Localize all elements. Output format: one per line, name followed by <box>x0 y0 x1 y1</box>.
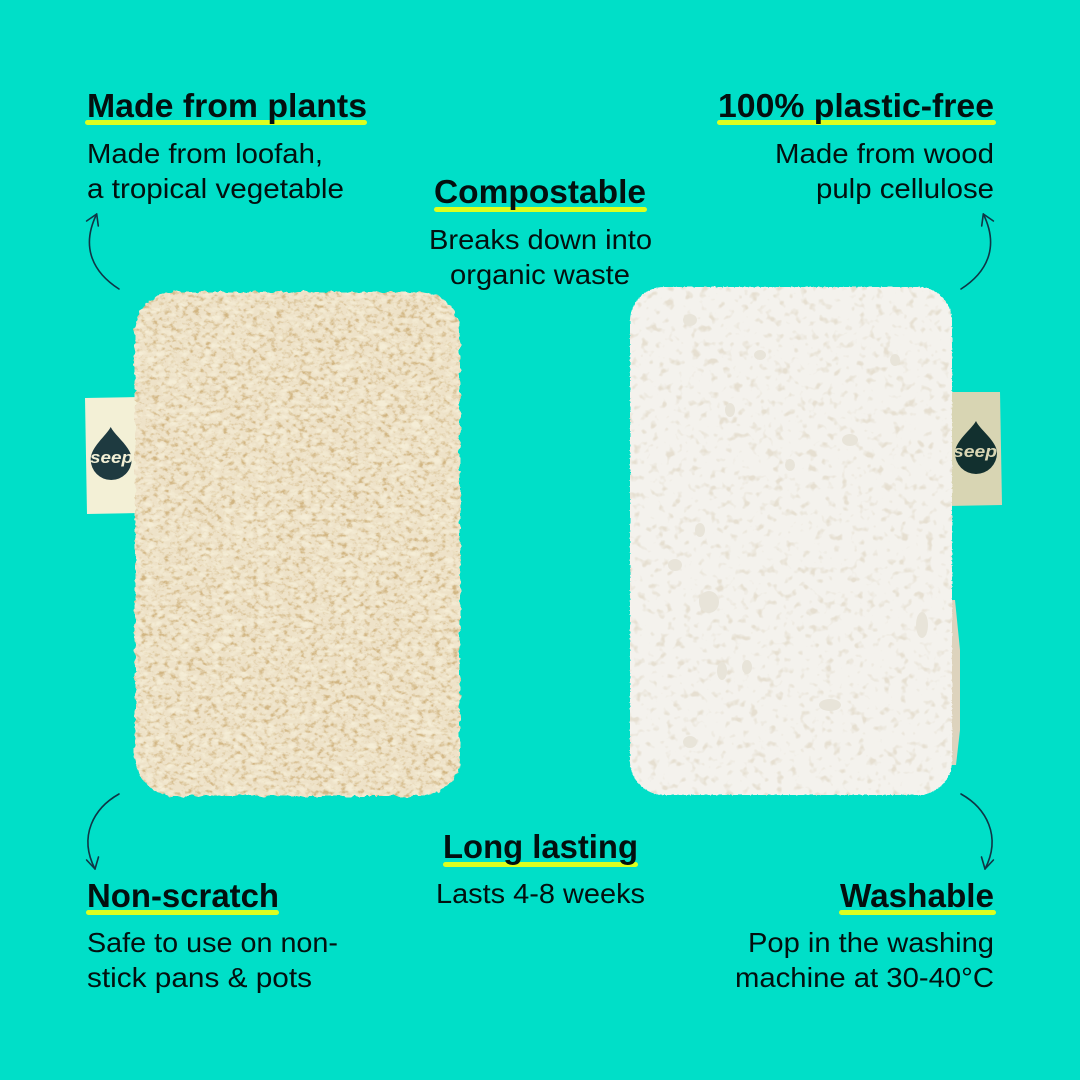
heading: Long lasting <box>443 828 638 865</box>
icon: right seep drop <box>955 421 997 474</box>
text block: Made from loofah, <box>87 138 323 169</box>
callout: washable <box>735 877 996 993</box>
large pores <box>668 314 928 748</box>
text block: stick pans & pots <box>87 962 312 993</box>
heading: Non-scratch <box>87 877 279 914</box>
right seep wordmark: seep <box>953 442 997 461</box>
text block: Safe to use on non- <box>87 927 338 958</box>
cellulose sponge <box>630 287 960 795</box>
callout: non-scratch <box>86 877 338 993</box>
text block: Made from wood <box>775 138 994 169</box>
tag: left seep label <box>85 397 140 514</box>
heading: Made from plants <box>87 87 367 124</box>
text block: organic waste <box>450 259 630 290</box>
text block <box>429 224 652 290</box>
icon: left seep drop <box>91 427 132 480</box>
callout: compostable <box>429 173 652 290</box>
text block <box>775 138 994 204</box>
heading: Compostable <box>434 173 646 210</box>
callout: long lasting <box>436 828 645 909</box>
text block: Pop in the washing <box>748 927 994 958</box>
text block <box>735 927 994 993</box>
text block <box>87 138 344 204</box>
text block: a tropical vegetable <box>87 173 344 204</box>
text block: Lasts 4-8 weeks <box>436 878 645 909</box>
arrow: bottom left <box>87 794 119 869</box>
arrow: top left <box>87 214 119 289</box>
left seep wordmark: seep <box>90 448 133 467</box>
tag: right seep label <box>945 392 1002 506</box>
heading: Washable <box>840 877 994 914</box>
loofah sponge <box>135 292 460 796</box>
text block <box>87 927 338 993</box>
callout: 100% plastic-free <box>717 87 996 204</box>
arrow: bottom right <box>961 794 993 869</box>
text block: Breaks down into <box>429 224 652 255</box>
callout: made from plants <box>85 87 367 204</box>
heading: 100% plastic-free <box>718 87 994 124</box>
text block: pulp cellulose <box>816 173 994 204</box>
text block: machine at 30-40°C <box>735 962 994 993</box>
arrow: top right <box>961 214 993 289</box>
